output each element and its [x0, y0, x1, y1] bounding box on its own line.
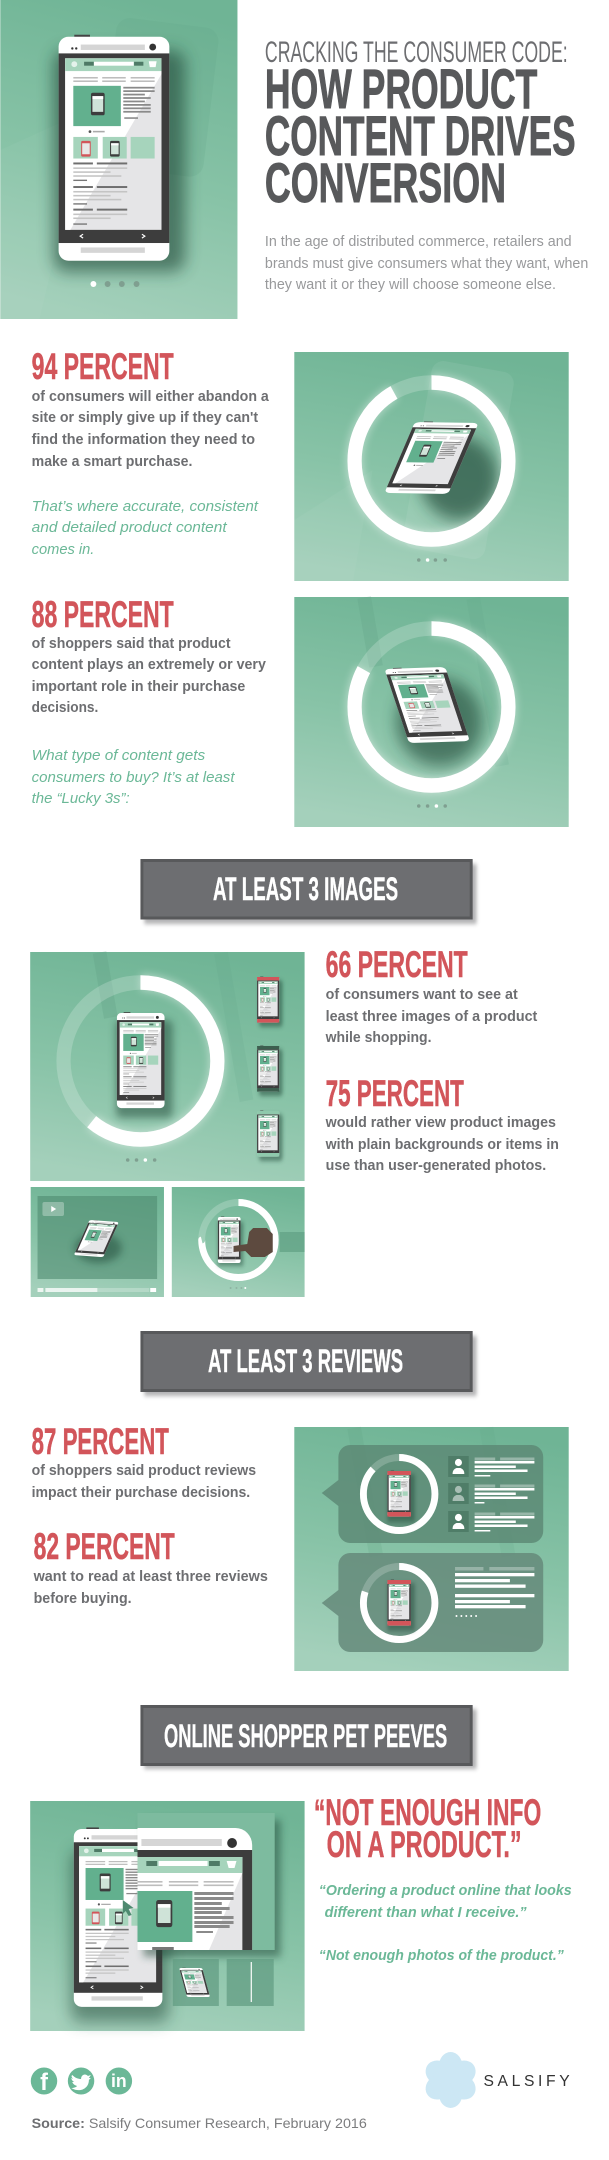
- stat: 88 percent: decisions.: [32, 700, 98, 716]
- icon: tilted phone: [384, 421, 479, 494]
- green italic note: accurate content: [32, 499, 259, 558]
- stat: 87 percent: of shoppers said product reviews: [32, 1463, 256, 1479]
- stat: 94 percent: of consumers will either abandon a: [32, 389, 270, 405]
- stat: 94 percent: [32, 346, 270, 470]
- stat: 66 percent: 66 PERCENT: [326, 944, 468, 985]
- banner: at least 3 reviews: [142, 1332, 477, 1396]
- stat: 66 percent: while shopping.: [325, 1030, 431, 1046]
- icon: tilted phone: [74, 1220, 119, 1257]
- panel: hero phone: [0, 0, 237, 319]
- stat: 75 percent: 75 PERCENT: [326, 1073, 464, 1114]
- stat: 75 percent: [325, 1073, 559, 1174]
- carousel dots: [230, 1287, 246, 1289]
- icon: linkedin: in: [111, 2071, 127, 2091]
- carousel dots: [417, 804, 447, 808]
- icon: twitter: [68, 2068, 94, 2094]
- stat: 87 percent: impact their purchase decisions.: [32, 1485, 250, 1501]
- pull quote: not enough info: [314, 1792, 541, 1865]
- progress ring: [355, 628, 508, 786]
- panel: hand touching phone: [172, 1187, 305, 1297]
- intro paragraph: brands must give consumers what they want, when: [265, 256, 588, 272]
- green italic note: Lucky 3s: What type of content gets: [32, 748, 206, 764]
- green italic note: Lucky 3s: consumers to buy? It’s at least: [32, 770, 235, 786]
- review bubble 1: [322, 1445, 543, 1543]
- stat: 94 percent: make a smart purchase.: [32, 454, 192, 470]
- intro paragraph: they want it or they will choose someone else.: [265, 277, 556, 293]
- stat: 82 percent: before buying.: [34, 1591, 132, 1607]
- intro paragraph: [265, 234, 588, 293]
- progress ring: [355, 382, 508, 540]
- quote: ordering different: different than what I receive.”: [325, 1905, 527, 1921]
- quote: ordering different: [319, 1883, 572, 1921]
- stat: 88 percent: content plays an extremely or very: [32, 657, 267, 673]
- quote: ordering different: “Ordering a product online that looks: [319, 1883, 572, 1899]
- stat: 82 percent: want to read at least three reviews: [33, 1569, 268, 1585]
- review row 3: [448, 1511, 534, 1532]
- green italic note: Lucky 3s: [32, 748, 235, 807]
- video progress bar: [38, 1288, 156, 1292]
- carousel dots: [417, 558, 447, 562]
- review row 1: [448, 1456, 534, 1477]
- stat: 94 percent: find the information they need to: [32, 432, 255, 448]
- panel: pet peeves zoomed product page: [30, 1801, 305, 2031]
- progress ring: [64, 982, 217, 1140]
- banner: at least 3 reviews: AT LEAST 3 REVIEWS: [208, 1343, 403, 1379]
- title: [265, 37, 576, 214]
- icon: linkedin: [106, 2068, 132, 2094]
- zoom overlay: [138, 1813, 275, 1950]
- intro paragraph: In the age of distributed commerce, retailers and: [265, 234, 572, 250]
- icon: facebook: [31, 2068, 57, 2096]
- thumbnail: tilted phone: [173, 1959, 219, 2006]
- carousel dots: [126, 1158, 156, 1162]
- review row 2: [448, 1483, 534, 1504]
- icon: hand: [234, 1228, 273, 1257]
- icon: red phone thumbnail: [257, 977, 283, 1027]
- icon: green phone thumbnail: [257, 1111, 283, 1161]
- icon: phone: [218, 1217, 241, 1263]
- banner: at least 3 images: [142, 860, 477, 924]
- green italic note: Lucky 3s: the “Lucky 3s”:: [32, 791, 130, 807]
- carousel dots: [90, 281, 139, 287]
- stat: 66 percent: of consumers want to see at: [326, 987, 518, 1003]
- stat: 66 percent: [325, 944, 537, 1046]
- progress ring: [202, 1202, 275, 1278]
- stat: 75 percent: use than user-generated photos.: [326, 1158, 546, 1174]
- panel: video thumbnail: [31, 1187, 164, 1297]
- icon: phone behind: [74, 1827, 162, 2007]
- stat: 94 percent: site or simply give up if they can't: [32, 410, 258, 426]
- panel: ring with tilted phone 94: [294, 352, 569, 581]
- logo: Salsify: [421, 2052, 570, 2108]
- icon: dark phone thumbnail: [257, 1046, 283, 1096]
- stat: 88 percent: of shoppers said that product: [32, 636, 231, 652]
- icon: hero phone: [59, 35, 169, 261]
- green italic note: accurate content: comes in.: [32, 542, 94, 558]
- stat: 75 percent: with plain backgrounds or items in: [325, 1137, 559, 1153]
- banner: online shopper pet peeves: [142, 1706, 477, 1769]
- panel: ring with tilted phone 88: [294, 596, 569, 827]
- icon: cursor arrow: [123, 1900, 134, 1916]
- icon: play button: [42, 1202, 64, 1216]
- stat: 88 percent: 88 PERCENT: [32, 594, 174, 635]
- panel: reviews: [294, 1427, 569, 1671]
- green italic note: accurate content: That’s where accurate, consistent: [32, 499, 259, 515]
- stat: 66 percent: least three images of a product: [326, 1009, 537, 1025]
- icon: facebook: f: [40, 2069, 48, 2096]
- stat: 82 percent: [33, 1526, 268, 1607]
- banner: at least 3 images: AT LEAST 3 IMAGES: [213, 871, 398, 907]
- stat: 87 percent: 87 PERCENT: [32, 1421, 169, 1462]
- thumbnail: side view: [227, 1959, 274, 2006]
- logo: Salsify: SALSIFY: [483, 2073, 570, 2090]
- stat: 82 percent: 82 PERCENT: [34, 1526, 175, 1567]
- review bubble 2: [322, 1553, 543, 1652]
- green italic note: accurate content: and detailed product content: [32, 520, 228, 536]
- stat: 87 percent: [32, 1421, 256, 1501]
- stat: 94 percent: 94 PERCENT: [32, 346, 174, 387]
- panel: product images ring: [30, 951, 305, 1181]
- stat: 75 percent: would rather view product images: [325, 1115, 556, 1131]
- source line: Source: Salsify Consumer Research, February 2016: [32, 2115, 367, 2131]
- icon: tilted phone: [384, 666, 470, 743]
- stat: 88 percent: [32, 594, 267, 716]
- icon: main phone: [117, 1012, 165, 1108]
- stat: 88 percent: important role in their purchase: [32, 679, 245, 695]
- quote: not enough photos: “Not enough photos of the product.”: [319, 1948, 564, 1964]
